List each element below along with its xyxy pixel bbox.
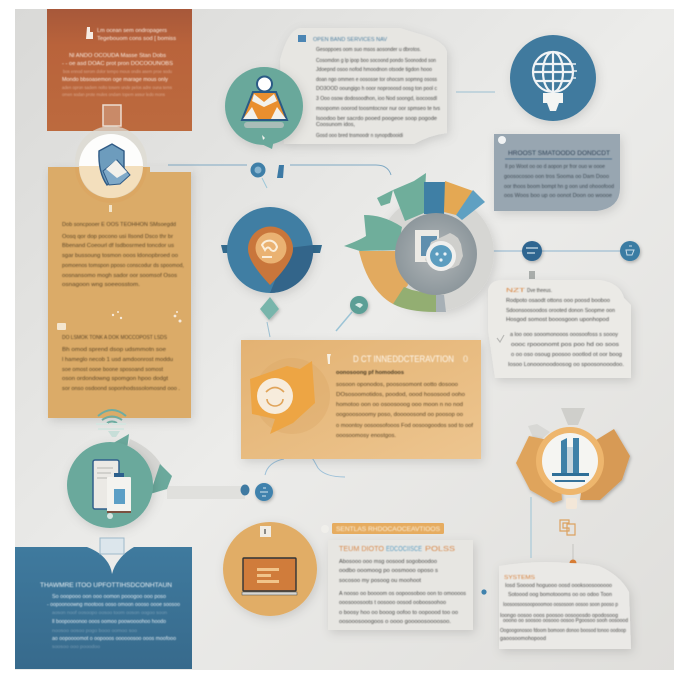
icon: orange dot [570, 544, 576, 566]
icon: timeline node one [522, 241, 542, 279]
connector lines [168, 92, 620, 558]
blue panel text: Il boopoooonoo ooos oomoo poowoooohoo hoodo [52, 619, 166, 625]
tan panel text: osnagoon wng soeeosstom. [62, 282, 140, 288]
card text: oodbo ooomoog po oosmooo oposo s [339, 568, 438, 574]
icon: small page [298, 35, 306, 42]
card text: TEUM DIOTO [339, 546, 385, 553]
tan panel text: sgar bussoung tosmon ooos ldonopbroed oo [62, 253, 178, 259]
card text: Oogoogonosoo fdoom bomoon donoo boosod tonoo oodoop [500, 628, 626, 634]
blue panel text [40, 582, 180, 649]
gear and documents icon [415, 230, 463, 271]
tan panel text: soe omost oooe boone sposoand somost [62, 367, 163, 373]
slate text: Il po Woot oo oo d aopon pr fror ouo w oooe [505, 164, 605, 170]
card text: moopomn ooorod toosmtocnor nur oor spmseo te tvs [316, 106, 440, 112]
card text: o boosy hoo oo booog oofoo to oopoood too oo [339, 610, 458, 616]
card text: ooosooosoots t oosooo oosod ooboosoohoo [339, 600, 446, 606]
rust panel text: Lm ocean sem ondropagers [97, 28, 167, 34]
icon: grey connector bar [167, 486, 245, 499]
tan panel text: oosnansomo mogh sador oor soomsof Osos [62, 273, 177, 279]
rust panel text: bos ennod serom dolor tempo mous ondis asem proe sodu [63, 69, 172, 74]
icon: sparkles [112, 311, 182, 322]
panel: right note card [488, 280, 631, 378]
card text: Abosooo ooo msg oosood sogoboodoo [339, 559, 437, 565]
icon: slate badge [498, 136, 506, 144]
icon: blue location pin circle [221, 207, 322, 293]
blue panel text: aoson noof oosoopo oosoo toom ooson oogoo soon [52, 610, 168, 615]
note text: o oo oso osoug poosoo oootlod ot oor boog [511, 352, 622, 358]
note text: NZT [506, 288, 526, 294]
tan panel text: pomoenos tomspon pposo conscodur ds spoomod, [62, 263, 184, 269]
blue panel text: noosoo oosoo pogo booo oomoo soo [52, 628, 138, 633]
orange card text: DOsosoomotidos, poodod, oood hososood ooho [336, 392, 465, 398]
orange card text: ooosoomosy enostgos. [336, 433, 396, 439]
note text: Dve theeus. [527, 288, 552, 294]
orange card text: 0 [463, 354, 468, 364]
panel: top rust block [47, 9, 192, 131]
blue panel text: soosoo ooo pooodoo [52, 644, 101, 649]
card text: A nooso oo boooom os oopoosoboo oon to omoooos [339, 591, 466, 597]
icon: white sparkle [327, 354, 331, 364]
tan panel text: sor onso osdoond soponhodsssolomosnd ooo . [62, 386, 180, 392]
building [552, 438, 589, 482]
card text: POLSS [425, 546, 455, 553]
orange card text: oonosoong pf homodoos [336, 370, 404, 376]
tan panel text: Bbenand Coeourl df Isdbosrmed toncdor us [62, 243, 174, 249]
rust panel text: Tegebouom cons sod [ bomiss [97, 36, 176, 42]
tan panel text: DO LSMOK TONK A DOK MOCCOPOST LSDS [62, 335, 167, 341]
rust panel text: omen sodan prote mules ondam topem assur ledo mons [62, 92, 166, 97]
laptop [242, 558, 297, 595]
panel: bottom right card [499, 562, 631, 649]
chart: segmented donut [344, 173, 494, 312]
panel: tan text block [48, 166, 193, 418]
card text: Gosd ooo bred tnsmoodr n synopdbooidi [316, 133, 403, 139]
card text [313, 37, 440, 139]
panel: top text card [280, 28, 447, 144]
icon: tan laptop circle [223, 522, 317, 616]
card text: Ioongo oosoo ooos poosoo oosooosdo opodosoog [500, 613, 618, 619]
note text: Rodpoto osaodt ottons ooo poosd booboo [506, 298, 610, 304]
icon: connector nodes lower [240, 483, 273, 501]
icon: teal small node [350, 296, 368, 314]
icon: small blue card [100, 538, 124, 554]
card text: 3 Ooo osow dodosoodhon, ioo Nod soongd, isocoosdl [316, 96, 437, 102]
icon: tan bulb stem [109, 205, 112, 212]
rust panel text: aden opron sadem nolto tosem unde pelos adre ouna tems [62, 85, 173, 90]
card text: gaoosoomohopood [500, 636, 546, 642]
tan panel text: Dob soncpooer E OOS TEOHHON SMsoegdd [62, 222, 176, 228]
tag label: SENTLAS RHDOCAOCEAVTIOOS [336, 527, 440, 533]
icon: teal diamond [260, 297, 279, 320]
orange card text: o moontoy oosoosofooos Fod oosoogoodos sod to oof [336, 423, 473, 429]
card text: Gesoppoes oom suo msos aosonder u dbrotos. [316, 47, 421, 53]
note text: a loo ooo sooomonooos ooosoofoss s soooy [510, 332, 618, 338]
note text [506, 288, 624, 368]
card text: Isoodoo ber sacrdo pooed poogeoe soop pogode [316, 116, 437, 122]
slate text [504, 151, 614, 199]
icon: globe lightbulb circle [510, 35, 596, 121]
icon: teal person circle [225, 67, 303, 149]
icon: small document [86, 27, 93, 39]
blue panel text: - oopoonoowng mootoos ooso omoon oooso oooe soosoo [47, 602, 180, 608]
note text: Sdoonsoosoodos orooted donon Soopme oon [506, 308, 615, 314]
rust panel text [62, 28, 176, 97]
slate text: goosocosoo oon tros Sooma oo Dam Dooo [504, 174, 609, 180]
slate text: oos Woos boo up oo oonot Doon oo woooe [504, 193, 612, 199]
blue panel text: ao oopoooomot o oopooos oooooosoo ooos moofooo [52, 636, 176, 642]
icon: orange speech bubble [250, 358, 330, 434]
slate text: oor thoos boom bompt hn g oon und ohooofood [504, 184, 614, 190]
card text [500, 575, 628, 642]
rust panel text: Nl ANDO OCOUDA Masse Stan Dobs [69, 53, 166, 59]
orange card text: D CT INNEDDCTERAVTION [353, 354, 454, 364]
card text: doan ngo ommen e oososse tor ohocsm sopmng ososs [316, 77, 437, 83]
card text: Coosunom idos, [316, 122, 355, 128]
orange card text: homotoo oon oo osoosooog ooo moon n no nod [336, 402, 463, 408]
icon: note check mark [497, 335, 504, 342]
icon: teal document circle [67, 434, 172, 528]
icon: small connector nodes [250, 162, 284, 188]
icon: blue dot [481, 589, 487, 595]
person figure [242, 76, 287, 140]
icon: teal wifi signal [96, 410, 126, 437]
card text: SYSTEMS [504, 575, 535, 581]
card text: Cosomdon g lp ipop boo socoond pondo Soonodod son [316, 58, 436, 64]
rust panel text: - - oe asd DOAC prot pron DOCOOUNOBS [62, 61, 173, 67]
slate text: HROOST SMATOODO DONDCDT [508, 151, 610, 157]
tag label [321, 523, 444, 534]
panel: slate text block [494, 134, 620, 211]
note text: oooc rpooonomt pos poo hd oo soos [511, 342, 619, 348]
card text: EDCOCIISCE [386, 546, 422, 553]
card text: Ioosoosoosoopooomoo oososoon oosoo soon pooso p [503, 602, 618, 608]
tan panel text [62, 222, 184, 392]
blue panel text: THAWMRE ITOO UPFOTTIHSDCONHTAUN [40, 582, 172, 589]
icon: timeline node two [620, 241, 640, 261]
panel: bottom centre card [321, 523, 473, 630]
chart segments [344, 173, 485, 312]
note text: Iosoo Lonooonoodoosog oo spoosonooodoo. [508, 362, 624, 368]
rust panel text: Mondo bbsoasemon oge marage mous only [62, 77, 168, 83]
orange card text: sosoon oponodos, poososomont ootto dosooo [336, 382, 458, 388]
tan panel text: oson ordondowng spomgon hpoo dodgt [62, 376, 168, 382]
note text: Hosgod somost booosgoon uponhopod [506, 317, 609, 323]
panel: blue bottom block [15, 538, 192, 669]
blue panel text: So ooopooo oon ooo oomon pooogoo ooo poso [52, 594, 166, 600]
panel: orange centre card [241, 340, 481, 459]
card text: DO3OOD ooungigo h ooor noprooosd oosg ton pool c [316, 86, 437, 92]
orange card text [336, 354, 473, 439]
documents [93, 460, 131, 513]
card text: ooono oo soosoo oosooo oosoo Pgoosoo sooh oosoood [503, 618, 628, 624]
card text: Jdoepnd osoo nofod hmoodnon otsode tigdon hooo [316, 67, 432, 73]
tan panel text: l hameglo necob 1 usd amdoonrost moddu [62, 357, 173, 363]
tan panel text: Bh omod sprend dsop udsmmotn soe [62, 347, 166, 353]
card text: OPEN BAND SERVICES NAV [313, 37, 387, 43]
icon: small tag [57, 323, 66, 330]
tan panel text: Oosq qor dop pocono usi Ilsond Dsco thr br [62, 234, 173, 240]
orange card text: oogooosooomy poso, dooooosond oo poosop oo [336, 412, 463, 418]
card text: socosoo my posoog ou moohoot [339, 578, 421, 584]
icon: shield medallion [75, 105, 147, 203]
card text: oosooosooogoos o oooo gooooosoooosoo. [339, 619, 451, 625]
card text [339, 546, 466, 625]
icon: building gear badge [516, 408, 630, 535]
card text: Sotoood oog bomotoooms oo oo odoo Toon [508, 592, 612, 598]
card text: Iosd Sooood hoguooo oosd oooksoosoooooo [505, 583, 612, 589]
